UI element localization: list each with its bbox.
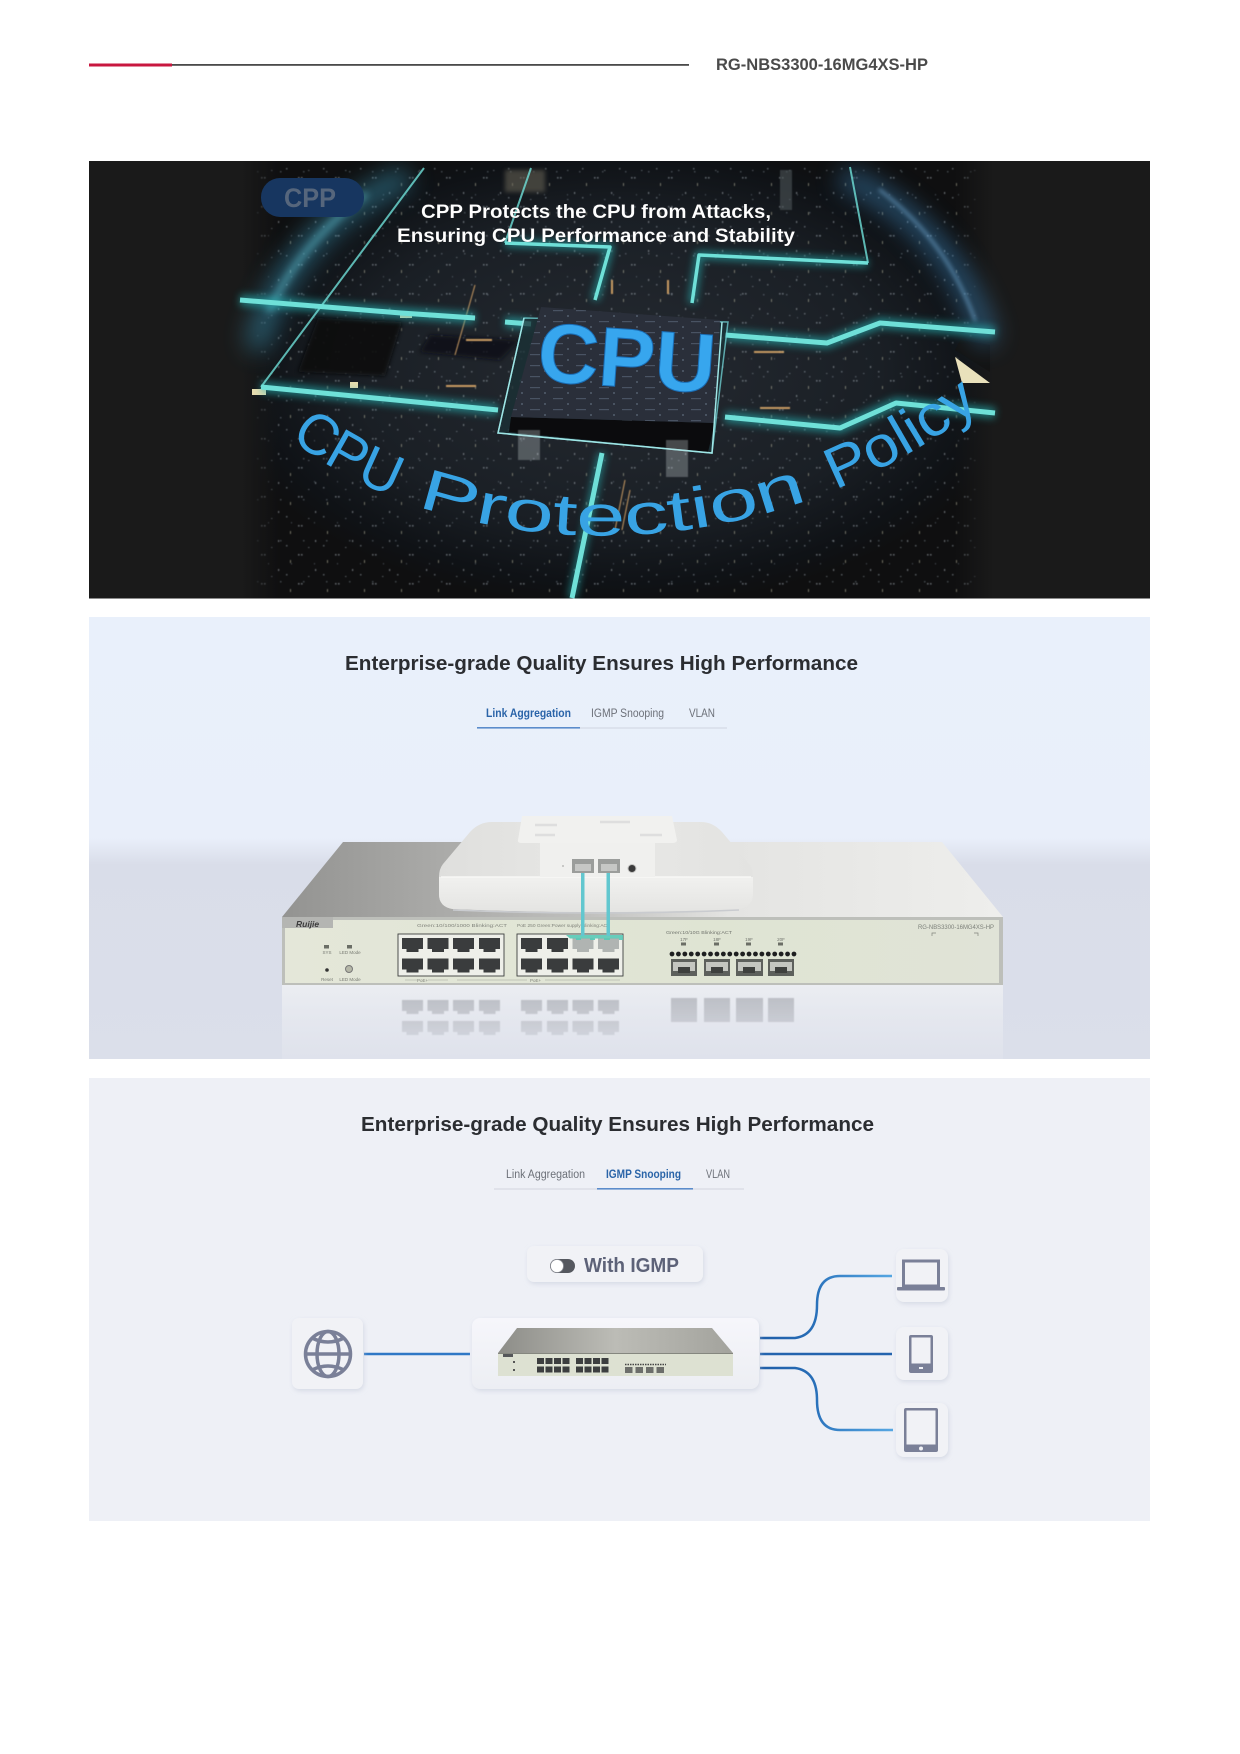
SFP port group: Green:10/10G Blinking:ACT: [666, 930, 732, 935]
image caption: [397, 202, 795, 247]
tab bar: Link Aggregation: [506, 1169, 585, 1181]
tab bar: IGMP Snooping: [591, 708, 664, 720]
line: internet to switch: [364, 1353, 470, 1355]
curved label: CPU Protection Policy: [298, 381, 972, 536]
small SFP ports: [625, 1367, 664, 1373]
globe card: [292, 1318, 363, 1389]
curved label: CPU Protection Policy: Policy: [824, 381, 972, 488]
status LEDs and labels: LED Mode: [339, 977, 361, 982]
icon: laptop: [897, 1261, 945, 1290]
tab bar: [477, 708, 727, 729]
CPU chip: [498, 305, 728, 477]
model label on switch: [918, 924, 994, 936]
curved label: CPU Protection Policy: Protection: [424, 470, 802, 536]
mounting plate: [518, 816, 677, 843]
line: switch to phone: [760, 1353, 892, 1355]
image caption: Ensuring CPU Performance and Stability: [397, 226, 795, 247]
status LEDs and labels: LED Mode: [339, 950, 361, 955]
tab bar: VLAN: [689, 708, 715, 720]
highlighted ports: [572, 938, 619, 952]
port legend: Green:10/100/1000 Blinking:ACT: [417, 923, 507, 928]
tablet card: [896, 1403, 948, 1457]
toggle chip: With IGMP: With IGMP: [584, 1254, 679, 1277]
SFP port group: [666, 930, 794, 976]
line: switch to laptop: [760, 1276, 892, 1338]
small RJ45 ports: [537, 1358, 608, 1372]
panel: IGMP snooping: [89, 1078, 1150, 1521]
status LEDs and labels: SYS: [322, 950, 332, 955]
header rule and model name: [89, 55, 928, 74]
status LEDs and labels: [321, 945, 361, 982]
icon: globe: [306, 1332, 350, 1376]
aggregation cables: [581, 873, 610, 936]
connection lines: [364, 1276, 893, 1430]
panel: link aggregation: [89, 617, 1150, 1059]
access point front: [439, 877, 753, 912]
model name: RG-NBS3300-16MG4XS-HP: [716, 55, 928, 74]
heading: Enterprise-grade Quality Ensures High Performance: [361, 1113, 874, 1136]
RJ45 port blocks: [398, 934, 623, 976]
tab bar: Link Aggregation: [486, 708, 571, 720]
switch front panel: [282, 917, 1003, 985]
tab bar: IGMP Snooping: [606, 1169, 681, 1181]
LAN ports: [572, 859, 620, 873]
SFP port group: 20F: [777, 937, 785, 942]
SFP port group: 18F: [713, 937, 721, 942]
curved label: CPU Protection Policy: CPU: [298, 414, 404, 491]
glowing circuit traces: [240, 167, 995, 598]
small switch: [498, 1328, 733, 1376]
phone card: [896, 1327, 948, 1380]
icon: phone: [909, 1335, 933, 1373]
CPU label: CPU: [535, 305, 719, 411]
brand mark: Ruijie: [296, 919, 319, 929]
CPP badge: CPP: [284, 183, 336, 213]
panel: CPU protection policy image: [89, 161, 1150, 598]
toggle chip: With IGMP: [527, 1246, 703, 1282]
SFP port group: 19F: [745, 937, 753, 942]
CPP badge: [261, 178, 364, 217]
toggle switch: [550, 1259, 575, 1273]
tab bar: VLAN: [706, 1169, 730, 1181]
tab bar: [494, 1169, 744, 1190]
port legend: PoE+: [530, 978, 542, 983]
port legend: PoE 250 Green:Power supply Blinking:ACT: [517, 923, 610, 928]
access point: [439, 816, 753, 913]
power jack: [628, 864, 636, 872]
port legend: [405, 923, 620, 983]
laptop card: [896, 1249, 948, 1302]
blue shield arcs: [258, 180, 985, 340]
switch top surface: [282, 842, 1003, 917]
reflection of switch: [282, 985, 1003, 1035]
header rule: [89, 64, 689, 66]
status LEDs and labels: Reset: [321, 977, 334, 982]
recess: [540, 842, 655, 877]
SFP port group: 17F: [680, 937, 688, 942]
model label on switch: RG-NBS3300-16MG4XS-HP: [918, 924, 994, 931]
heading: Enterprise-grade Quality Ensures High Performance: [345, 652, 858, 675]
icon: tablet: [904, 1408, 938, 1452]
circuit board background: [241, 161, 994, 598]
switch card: [472, 1318, 759, 1389]
image caption: CPP Protects the CPU from Attacks,: [421, 202, 771, 223]
port legend: PoE+: [417, 978, 429, 983]
switch: [282, 842, 1003, 985]
line: switch to tablet: [760, 1368, 893, 1430]
